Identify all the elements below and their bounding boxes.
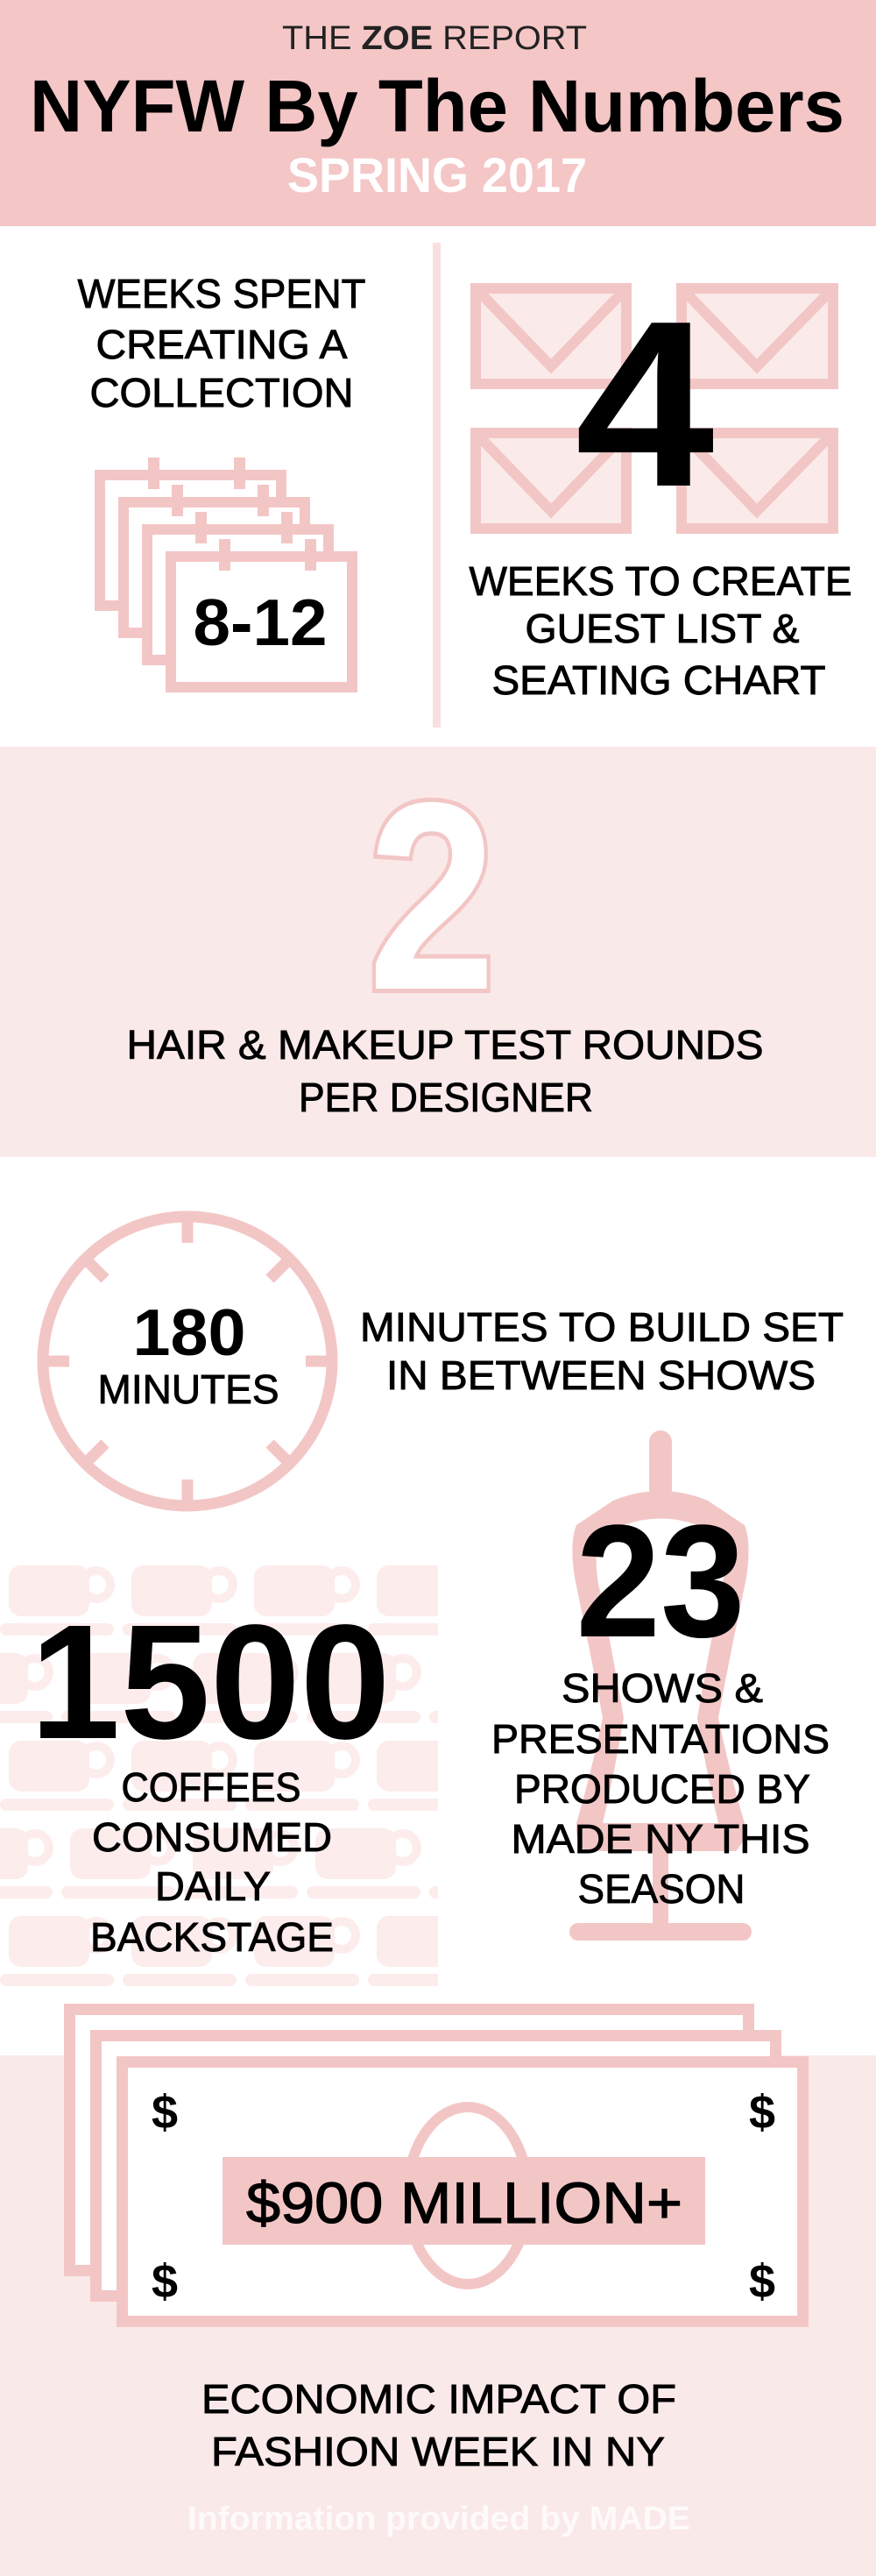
label: coffees consumed daily backstage: CONSUMED <box>92 1814 332 1860</box>
dollar signs <box>152 2086 775 2308</box>
dollar signs: $ <box>152 2086 178 2139</box>
label: coffees consumed daily backstage: DAILY <box>155 1863 271 1909</box>
number: 23: 23 <box>576 1491 745 1671</box>
label: shows and presentations: MADE NY THIS <box>512 1816 809 1862</box>
number: 8-12: 8-12 <box>193 585 328 659</box>
panel: hair and makeup <box>0 747 876 1157</box>
panel: weeks creating collection <box>77 271 366 687</box>
label: weeks to create guest list: GUEST LIST & <box>526 606 799 651</box>
label: hair makeup test rounds: HAIR & MAKEUP TEST ROUNDS <box>126 1022 764 1068</box>
label: economic impact: FASHION WEEK IN NY <box>211 2429 665 2474</box>
number: 4: 4 <box>575 273 716 536</box>
number: 1500: 1500 <box>30 1592 391 1773</box>
icon: stacked calendars <box>100 458 352 687</box>
icon: coffee cup pattern <box>0 1565 438 1990</box>
number: 180 minutes: MINUTES <box>98 1366 279 1412</box>
panel: guest list weeks <box>470 273 851 703</box>
label: shows and presentations: SEASON <box>578 1866 745 1912</box>
label: minutes to build set: MINUTES TO BUILD SET <box>360 1304 844 1350</box>
label: minutes to build set <box>360 1304 844 1398</box>
callout: 900 million <box>223 2157 705 2245</box>
label: shows and presentations: SHOWS & <box>562 1665 763 1711</box>
icon: envelopes <box>476 288 833 529</box>
dollar signs: $ <box>152 2255 178 2308</box>
icon: stacked bills <box>70 2009 802 2321</box>
number: 180 minutes <box>98 1295 279 1412</box>
brand: the zoe report: THE ZOE REPORT <box>282 20 587 57</box>
label: weeks to create guest list <box>470 558 851 703</box>
subtitle: SPRING 2017 <box>287 147 587 202</box>
title: NYFW By The Numbers <box>30 65 844 147</box>
icon: mannequin <box>569 1430 752 1941</box>
label: hair makeup test rounds <box>126 1022 764 1120</box>
panel: coffees <box>0 1565 438 1990</box>
panel: 180 minutes <box>43 1217 844 1506</box>
dollar signs: $ <box>749 2255 775 2308</box>
label: economic impact: ECONOMIC IMPACT OF <box>201 2376 676 2422</box>
label: coffees consumed daily backstage: COFFEES <box>121 1764 301 1810</box>
label: economic impact <box>201 2376 676 2474</box>
number: outlined 2: 2 <box>368 747 496 1046</box>
label: weeks to create guest list: SEATING CHART <box>492 657 825 703</box>
label: weeks spent creating a collection: COLLECTION <box>89 370 354 415</box>
label: coffees consumed daily backstage: BACKSTAGE <box>90 1914 334 1960</box>
callout: 900 million: $900 MILLION+ <box>246 2170 682 2235</box>
dollar signs: $ <box>749 2086 775 2139</box>
header band <box>0 0 876 226</box>
label: weeks spent creating a collection: CREATING A <box>96 322 348 367</box>
panel: economic impact <box>0 2009 876 2576</box>
label: shows and presentations: PRESENTATIONS <box>491 1716 830 1762</box>
footer: source: Information provided by MADE <box>187 2501 690 2537</box>
icon: clock <box>43 1217 332 1506</box>
label: weeks spent creating a collection: WEEKS SPENT <box>77 271 366 316</box>
label: shows and presentations <box>491 1665 830 1912</box>
label: weeks spent creating a collection <box>77 271 366 415</box>
panel: shows <box>491 1430 830 1941</box>
label: weeks to create guest list: WEEKS TO CREATE <box>470 558 851 604</box>
label: minutes to build set: IN BETWEEN SHOWS <box>386 1352 816 1398</box>
label: shows and presentations: PRODUCED BY <box>514 1766 810 1812</box>
label: hair makeup test rounds: PER DESIGNER <box>299 1075 593 1120</box>
label: coffees consumed daily backstage <box>90 1764 334 1960</box>
number: 180 minutes: 180 <box>133 1295 245 1369</box>
